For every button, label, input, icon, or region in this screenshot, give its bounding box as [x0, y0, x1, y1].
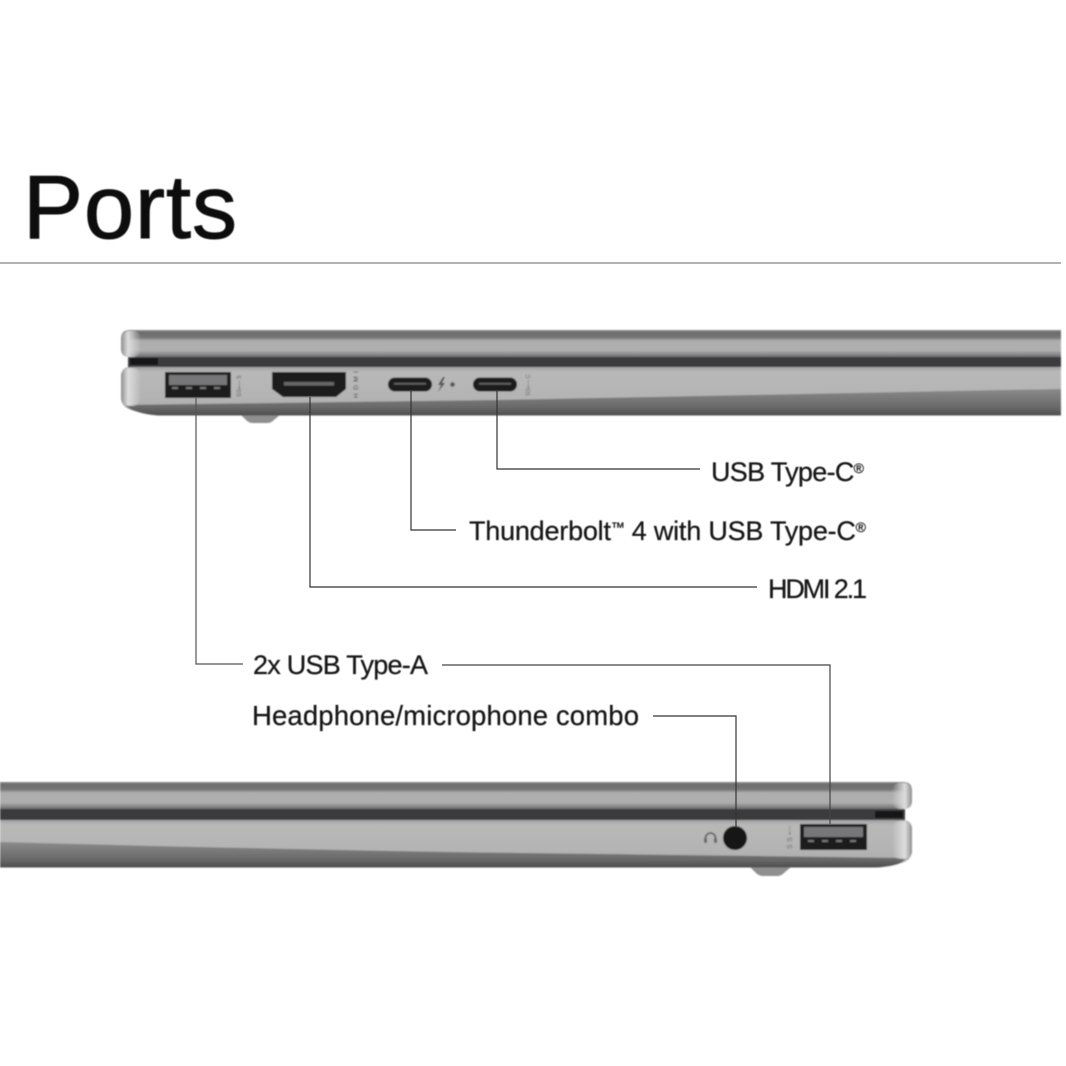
label: headphone combo: Headphone/microphone combo	[252, 700, 639, 731]
label: USB Type-C: USB Type-C	[711, 457, 854, 487]
hinge gap	[0, 808, 905, 820]
hinge gap	[128, 356, 1061, 368]
laptop: right side view with ports	[0, 782, 912, 876]
connector: Thunderbolt	[411, 391, 456, 530]
label: USB Type-C: ®	[854, 460, 865, 476]
connector: USB Type-A right	[442, 665, 830, 824]
laptop: left side view with ports	[121, 330, 1061, 423]
laptop lid	[0, 782, 912, 809]
port: HDMI: HDMI	[353, 371, 360, 398]
port: USB Type-C	[473, 373, 532, 396]
port: headphone jack	[723, 826, 747, 850]
connector: headphone	[653, 716, 736, 828]
port: USB Type-A	[165, 372, 243, 398]
label: Thunderbolt: 4 with USB Type-C	[625, 516, 856, 546]
icon: headphones	[704, 833, 717, 843]
laptop foot	[750, 867, 791, 876]
title: Ports	[23, 158, 237, 258]
connector: HDMI	[310, 397, 757, 587]
laptop lid	[121, 330, 1061, 357]
laptop base	[121, 367, 1061, 416]
port: HDMI	[272, 371, 360, 398]
connector: USB Type-C	[497, 391, 700, 469]
label: HDMI: HDMI 2.1	[768, 574, 867, 604]
icon: USB SuperSpeed: SS⟵	[787, 825, 794, 849]
port: Thunderbolt	[388, 377, 455, 392]
port: USB Type-A: SS⟵ 5	[237, 375, 243, 397]
label: Thunderbolt: ™	[611, 519, 625, 535]
header rule	[0, 262, 1061, 264]
label: Thunderbolt: Thunderbolt	[469, 516, 611, 546]
laptop base	[0, 820, 912, 868]
port: USB Type-C: SS⟵ C	[526, 373, 532, 396]
port: USB Type-A	[800, 824, 867, 850]
connector: USB Type-A left	[196, 398, 243, 664]
label: USB Type-A: 2x USB Type-A	[253, 650, 428, 680]
laptop foot	[240, 414, 281, 423]
label: Thunderbolt: ®	[856, 519, 867, 535]
